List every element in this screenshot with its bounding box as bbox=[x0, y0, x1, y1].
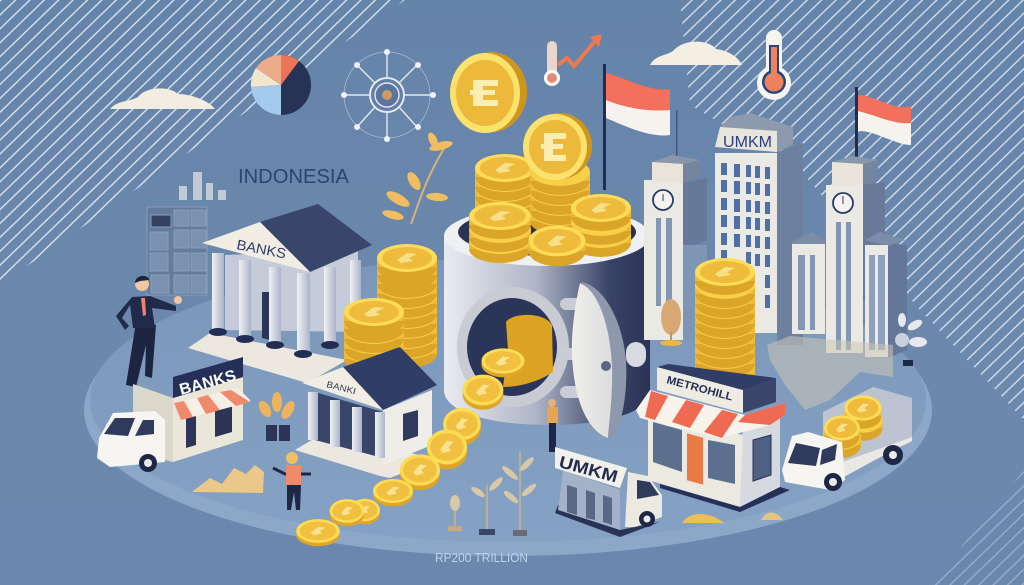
thermometer small bbox=[544, 41, 560, 86]
window left bbox=[653, 422, 682, 472]
title: INDONESIA: INDONESIA bbox=[238, 166, 350, 188]
sign front bbox=[657, 367, 743, 413]
main windows bbox=[836, 222, 851, 350]
wheels bbox=[824, 445, 903, 491]
businessman bbox=[116, 276, 182, 387]
cab bbox=[625, 472, 662, 527]
side wall bbox=[740, 410, 780, 507]
coin stack: tall bbox=[377, 244, 437, 368]
cap bbox=[652, 162, 683, 183]
head bbox=[135, 277, 149, 291]
vault hole bbox=[458, 208, 636, 256]
clock bbox=[653, 190, 673, 210]
cab bbox=[782, 432, 845, 490]
vault bbox=[444, 206, 650, 425]
tower: right group bbox=[792, 156, 907, 358]
body bbox=[715, 153, 777, 333]
faded building bbox=[767, 336, 893, 410]
truck: left bbox=[97, 411, 165, 472]
plant right bbox=[895, 313, 927, 366]
legs bbox=[126, 322, 156, 387]
awning stripes bbox=[174, 390, 250, 420]
pots bbox=[448, 526, 527, 536]
cab window bbox=[637, 480, 659, 499]
side handle bbox=[626, 342, 646, 367]
pediment bbox=[302, 367, 383, 410]
calculator grid bbox=[147, 207, 207, 295]
truck cab bbox=[97, 411, 165, 467]
shop window 2 bbox=[215, 405, 232, 437]
right wing roof bbox=[865, 232, 905, 246]
shop sign bbox=[173, 357, 243, 398]
awning stripes bbox=[645, 391, 785, 438]
steps bbox=[295, 438, 440, 478]
coins in the vault bbox=[469, 154, 631, 266]
cargo bbox=[823, 387, 912, 462]
seedlings bbox=[448, 452, 538, 536]
left wing bbox=[792, 244, 825, 334]
shop awning bbox=[174, 388, 250, 420]
truck windshield bbox=[104, 418, 135, 436]
hinge bolts bbox=[560, 298, 588, 398]
left wing windows bbox=[798, 255, 815, 330]
network diagram bbox=[341, 49, 436, 142]
stems bbox=[455, 452, 520, 532]
right wing side bbox=[888, 243, 907, 358]
columns bbox=[308, 392, 385, 458]
truck side window bbox=[135, 420, 154, 436]
coin at lip bbox=[463, 375, 503, 410]
cap top bbox=[652, 155, 700, 164]
vault door opening bbox=[457, 287, 569, 410]
bank pediment bbox=[202, 222, 310, 272]
top cap bbox=[720, 113, 793, 152]
coin: lower bbox=[824, 415, 861, 458]
caption: RP200 TRILLION: RP200 TRILLION bbox=[435, 550, 528, 565]
sand pile: centre bbox=[682, 514, 724, 523]
arrow head bbox=[590, 34, 602, 47]
shop front bbox=[173, 377, 243, 462]
main side bbox=[863, 182, 885, 300]
opening bbox=[467, 298, 557, 396]
vault rim bbox=[444, 206, 650, 266]
bank roof bbox=[260, 204, 372, 272]
coin stack: short bbox=[344, 298, 404, 373]
column bases bbox=[209, 328, 339, 358]
clock bbox=[833, 193, 853, 213]
UMKM kiosk bbox=[555, 447, 662, 537]
cap bbox=[832, 162, 863, 185]
body bbox=[644, 180, 683, 340]
left wing roof bbox=[792, 232, 825, 248]
tower: UMKM bbox=[715, 113, 803, 345]
cap side bbox=[863, 158, 878, 185]
glass body bbox=[558, 470, 620, 530]
small bar chart bbox=[179, 172, 226, 200]
right wing windows bbox=[869, 255, 885, 350]
front wall bbox=[648, 410, 743, 507]
plant with gold leaves bbox=[381, 131, 454, 224]
sign label: BANKS bbox=[178, 367, 238, 399]
label: BANKI bbox=[326, 379, 357, 396]
shop windows bbox=[186, 415, 196, 448]
windshield bbox=[788, 443, 820, 466]
flag: right bbox=[855, 87, 911, 165]
shop side bbox=[133, 384, 173, 462]
door edge bbox=[581, 282, 626, 438]
door lock bbox=[601, 361, 611, 371]
torso and arms bbox=[116, 296, 176, 330]
ground ellipse bbox=[84, 258, 932, 556]
door face bbox=[572, 283, 612, 438]
cap top bbox=[832, 156, 878, 164]
chassis bbox=[842, 437, 912, 478]
window bbox=[403, 410, 418, 441]
side window bbox=[820, 444, 837, 465]
cloud: right bbox=[650, 42, 742, 65]
golden plant bbox=[256, 392, 297, 441]
rising arrow bbox=[558, 40, 596, 66]
back wall bbox=[315, 392, 383, 458]
bank wall bbox=[225, 250, 358, 332]
main front bbox=[826, 185, 863, 353]
side window bbox=[753, 435, 771, 481]
truck: right bbox=[782, 387, 912, 491]
side wall bbox=[777, 143, 803, 345]
tie bbox=[141, 298, 146, 316]
side wall bbox=[683, 178, 707, 250]
gold inside bbox=[503, 315, 553, 387]
worker: orange vest bbox=[273, 452, 311, 510]
door bbox=[686, 432, 704, 486]
coin in opening bbox=[481, 348, 525, 377]
sign label: METROHILL bbox=[665, 374, 734, 404]
tower: left bbox=[644, 110, 707, 340]
sand pile: right bbox=[761, 512, 783, 520]
storefront: centre bbox=[636, 364, 790, 512]
roof bbox=[657, 364, 776, 390]
antenna bbox=[676, 110, 678, 160]
upright coin bbox=[523, 113, 592, 180]
sign bbox=[555, 447, 627, 488]
leaves bbox=[450, 456, 538, 511]
plant near towers bbox=[660, 299, 682, 346]
bank columns bbox=[212, 253, 361, 352]
windows bbox=[656, 218, 672, 306]
label: BANKS on bank: BANKS bbox=[235, 236, 288, 261]
label: UMKM bbox=[723, 134, 772, 151]
vault door bbox=[560, 282, 646, 438]
truck wheel bbox=[139, 454, 157, 472]
bank: large bbox=[188, 204, 372, 383]
sign side bbox=[743, 378, 776, 413]
pie chart bbox=[251, 55, 311, 115]
storefront: BANKS bbox=[133, 357, 250, 462]
pillars bbox=[567, 485, 612, 525]
flag: centre bbox=[603, 64, 670, 190]
bank: small bbox=[295, 347, 440, 478]
lower side bbox=[683, 245, 707, 340]
thermometer right bbox=[757, 30, 791, 100]
sign bbox=[715, 127, 777, 152]
sign label: UMKM bbox=[557, 453, 620, 486]
coin stack: right bbox=[695, 258, 755, 388]
cap side bbox=[683, 160, 700, 183]
windows bbox=[721, 163, 770, 308]
diagonal stripes: top left bbox=[0, 0, 405, 285]
bank door bbox=[262, 292, 270, 340]
right wing front bbox=[865, 245, 888, 357]
hair bbox=[135, 276, 149, 283]
bank steps bbox=[188, 333, 347, 383]
cloud: left bbox=[110, 88, 215, 109]
base bbox=[555, 505, 660, 537]
wall bbox=[383, 390, 432, 465]
sand pile: left bbox=[192, 465, 264, 493]
diagonal stripes: bottom right bbox=[930, 470, 1024, 585]
base shadow bbox=[660, 484, 790, 512]
roof bbox=[343, 347, 437, 410]
vault body bbox=[444, 235, 650, 425]
ring bbox=[457, 287, 569, 407]
awning bbox=[636, 390, 785, 438]
coin trail bbox=[296, 408, 481, 546]
diagonal stripes: top right bbox=[680, 0, 1024, 420]
floating coin bbox=[450, 52, 527, 133]
wheel bbox=[639, 511, 655, 527]
small worker: vault bbox=[547, 399, 558, 452]
window right bbox=[708, 440, 735, 484]
coin: upper bbox=[844, 395, 883, 441]
hand bbox=[174, 296, 182, 304]
